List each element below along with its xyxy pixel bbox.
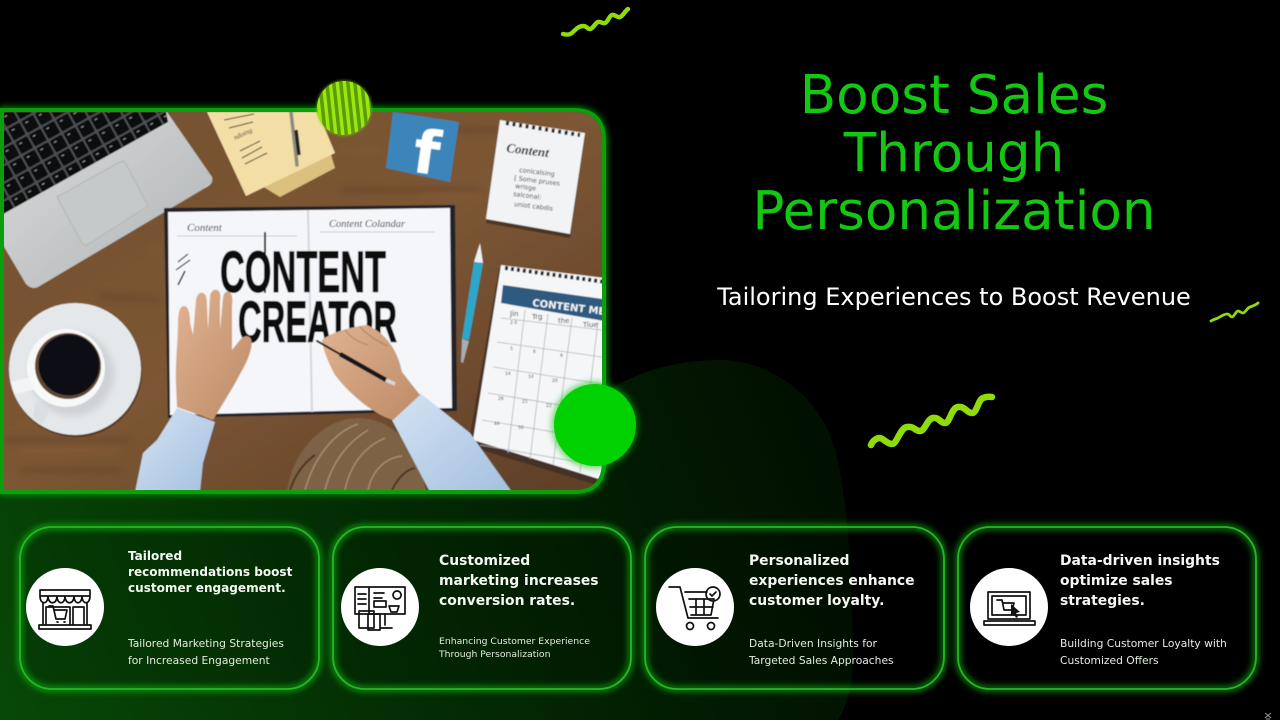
laptop [0, 112, 212, 288]
calendar: 50 [518, 425, 524, 431]
title: Boost Sales [800, 64, 1108, 126]
spiral notepad: conlcalsing [519, 166, 555, 178]
title: Personalization [752, 180, 1156, 242]
card 2 description: Through Personalization [438, 649, 551, 660]
right hand [322, 325, 420, 420]
green circle [552, 382, 638, 468]
open notebook: Content Colandar [329, 219, 406, 230]
card 4 [958, 527, 1256, 689]
photo frame border [2, 110, 604, 492]
small corner mark [1265, 713, 1271, 719]
facebook tile [386, 112, 459, 190]
card 4 heading: optimize sales [1060, 573, 1173, 589]
calendar: 6 [533, 349, 536, 355]
calendar: CONTENT ME [532, 298, 606, 318]
card 4 description: Building Customer Loyalty with [1060, 637, 1227, 650]
calendar [470, 264, 602, 484]
spiral notepad: Content [506, 140, 550, 160]
writing pen [317, 341, 395, 384]
title: Through [843, 122, 1064, 184]
card 1 description: Tailored Marketing Strategies [127, 637, 284, 650]
card 4 description: Customized Offers [1060, 654, 1159, 667]
calendar: 14 [528, 374, 534, 380]
calendar: Jin [509, 310, 518, 318]
background green blob [0, 360, 853, 720]
subtitle: Tailoring Experiences to Boost Revenue [716, 283, 1191, 311]
photo frame glow [2, 110, 604, 492]
open notebook: Content [187, 222, 223, 234]
card 3 description: Data-Driven Insights for [749, 637, 878, 650]
card 2 heading: marketing increases [439, 573, 599, 589]
calendar: 44 [494, 421, 500, 427]
wooden desk [0, 108, 606, 492]
card 1 heading: recommendations boost [128, 565, 293, 579]
calendar: 5 [510, 346, 513, 352]
calendar: 9 [560, 353, 563, 359]
icon: laptop with cart cursor [970, 568, 1048, 646]
icon: shopping cart with check [656, 568, 734, 646]
calendar: 26 [498, 396, 504, 402]
photo: content creator desk [0, 108, 620, 492]
card 2 heading: conversion rates. [439, 593, 575, 609]
card 1 [20, 527, 319, 689]
left sleeve [135, 408, 215, 492]
spiral notepad: [ Some pruses [514, 174, 561, 188]
open notebook: CONTENT [220, 240, 386, 305]
card 3 heading: Personalized [749, 553, 850, 569]
lime striped circle [316, 80, 378, 136]
card 3 heading: experiences enhance [749, 573, 915, 589]
spiral notepad: uniot cabdis [514, 200, 554, 213]
spiral notepad: wrisge [515, 182, 537, 193]
card 4 heading: strategies. [1060, 593, 1145, 609]
spiral notepad: salconal: [513, 190, 542, 201]
card 3 heading: customer loyalty. [749, 593, 884, 609]
card 2 description: Enhancing Customer Experience [439, 636, 590, 647]
squiggle: large [871, 397, 992, 445]
card 3 [645, 527, 944, 689]
card 1 heading: Tailored [128, 549, 182, 563]
yellow notes [207, 112, 335, 197]
calendar: 2 0 [510, 320, 517, 326]
calendar: Tiue [582, 321, 598, 329]
coffee cup [9, 303, 142, 437]
right sleeve [392, 393, 512, 492]
calendar: 20 [552, 378, 558, 384]
icon: online marketing screen [341, 568, 419, 646]
open notebook [164, 205, 457, 418]
calendar: Trg [531, 313, 542, 321]
open notebook: CREATOR [238, 290, 397, 355]
card 4 heading: Data-driven insights [1060, 553, 1220, 569]
card 2 [333, 527, 631, 689]
calendar: 14 [505, 371, 511, 377]
spiral notepad [486, 120, 585, 238]
calendar: 21 [522, 399, 528, 405]
facebook tile: f [409, 117, 445, 190]
squiggle: top [563, 9, 628, 35]
icon: shop front [26, 568, 104, 646]
card 2 heading: Customized [439, 553, 530, 569]
hair [287, 418, 426, 492]
squiggle: right small [1211, 303, 1258, 321]
card 3 description: Targeted Sales Approaches [748, 654, 894, 667]
card 1 heading: customer engagement. [128, 581, 286, 595]
card 1 description: for Increased Engagement [128, 654, 270, 667]
calendar: the [558, 317, 570, 325]
yellow notes: ndoing [232, 126, 254, 142]
blue pen [461, 243, 483, 363]
left hand [176, 290, 252, 420]
calendar: 22 [546, 403, 552, 409]
